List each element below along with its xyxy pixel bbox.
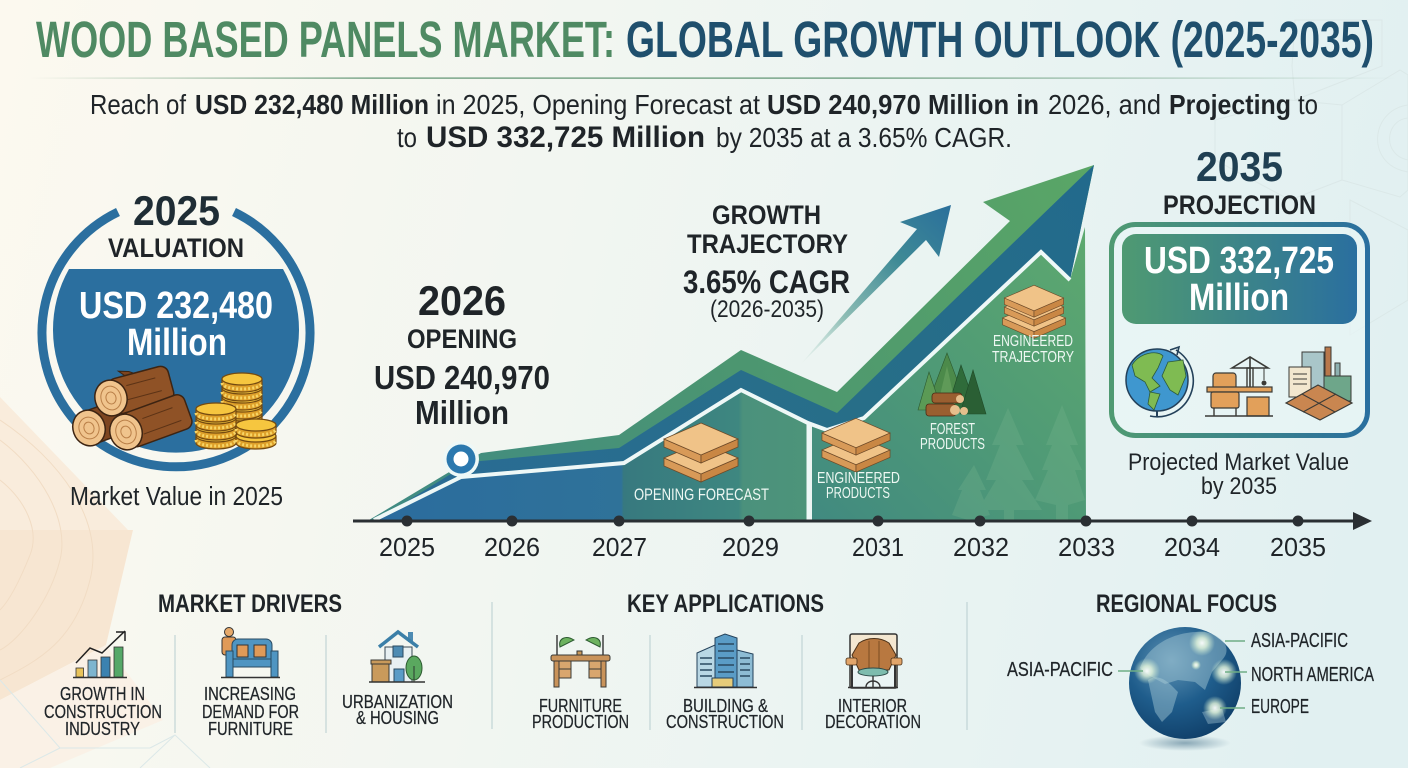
marker: 2026 point	[443, 441, 479, 477]
panel: 2025 valuation: Market Value in 2025	[70, 483, 283, 511]
arrow: secondary growth arrow	[800, 205, 951, 365]
panel: regional focus	[1007, 590, 1374, 751]
panel: 2035 projection: PROJECTION	[1163, 190, 1316, 220]
callout: 2026 opening: USD 240,970	[374, 359, 550, 396]
icon: furniture and crane	[1205, 357, 1273, 416]
label: increasing demand for furniture: FURNITURE	[208, 718, 293, 739]
callout: 2026 opening: Million	[415, 394, 509, 431]
label: urbanization and housing: & HOUSING	[356, 707, 439, 728]
area: opening forecast segment	[374, 390, 808, 521]
panel: 2035 projection: 2035	[1196, 143, 1283, 190]
subtitle: in 2025, Opening Forecast at	[436, 89, 760, 120]
icon: stacked logs	[68, 359, 194, 454]
label: Europe: EUROPE	[1251, 696, 1309, 718]
subtitle: USD 332,725 Million	[426, 121, 705, 154]
callout: growth trajectory CAGR: 3.65% CAGR	[683, 264, 850, 300]
axis year labels: 2035	[1270, 532, 1326, 562]
callout: growth trajectory CAGR: TRAJECTORY	[687, 229, 848, 259]
label: growth in construction industry: CONSTRUCTION	[44, 701, 162, 722]
label: engineered products: PRODUCTS	[826, 485, 890, 502]
label: increasing demand for furniture	[202, 683, 299, 739]
panel: key applications: KEY APPLICATIONS	[627, 590, 824, 618]
panel: market drivers: MARKET DRIVERS	[158, 590, 342, 618]
label: engineered trajectory: TRAJECTORY	[992, 349, 1074, 366]
subtitle: to	[397, 122, 417, 153]
label: engineered trajectory: ENGINEERED	[993, 333, 1073, 350]
icon: forest and logs	[918, 353, 986, 416]
label: forest products	[920, 421, 985, 453]
icon: interior chair	[846, 634, 902, 688]
label: building and construction	[666, 695, 784, 732]
subtitle: USD 240,970 Million in	[767, 89, 1039, 120]
axis year labels: 2029	[722, 532, 779, 562]
title: WOOD BASED PANELS MARKET:	[36, 11, 615, 68]
panel: 2025 valuation: 2025	[133, 187, 220, 234]
label: forest products: PRODUCTS	[920, 436, 985, 453]
panel: 2035 projection: USD 332,725	[1144, 240, 1334, 282]
label: increasing demand for furniture: DEMAND FOR	[202, 701, 299, 722]
label: engineered products: ENGINEERED	[817, 470, 900, 487]
panel: 2035 projection: Projected Market Value	[1128, 449, 1349, 476]
icon: house	[369, 632, 425, 682]
subtitle: 2026, and	[1048, 89, 1161, 120]
subtitle: USD 232,480 Million	[195, 89, 429, 120]
label: growth in construction industry	[44, 683, 162, 739]
axis year labels: 2033	[1058, 532, 1115, 562]
callout: growth trajectory CAGR: (2026-2035)	[710, 296, 824, 323]
label: growth in construction industry: GROWTH IN	[60, 683, 145, 704]
label: opening forecast: OPENING FORECAST	[634, 485, 769, 504]
label: forest products: FOREST	[930, 421, 975, 438]
callout: 2026 opening: OPENING	[407, 324, 517, 354]
icon: planks opening forecast	[664, 423, 738, 482]
icon: planks engineered products	[822, 418, 890, 472]
axis year labels: 2025	[379, 532, 435, 562]
panel: 2025 valuation	[42, 187, 310, 511]
panel: 2035 projection: Million	[1189, 277, 1289, 319]
panel: 2025 valuation: Million	[127, 322, 227, 364]
background trees	[952, 405, 1085, 520]
panel: regional focus: REGIONAL FOCUS	[1096, 590, 1277, 618]
label: building and construction: BUILDING &	[683, 695, 769, 716]
subtitle: Projecting	[1169, 89, 1291, 120]
rising band with large arrow	[369, 165, 1094, 521]
subtitle: by 2035 at a 3.65% CAGR.	[716, 122, 1012, 153]
icon: office buildings	[694, 634, 757, 688]
axis year labels: 2026	[484, 532, 540, 562]
axis year labels	[379, 532, 1326, 562]
label: growth in construction industry: INDUSTRY	[65, 718, 140, 739]
icon: world globe with markers	[1118, 627, 1247, 751]
label: furniture production: PRODUCTION	[532, 711, 629, 732]
panel: key applications	[532, 590, 921, 732]
panel: 2035 projection	[1112, 143, 1368, 500]
icon: desk with lamps	[551, 635, 610, 687]
icon: planks engineered trajectory	[1003, 285, 1065, 338]
label: Asia-Pacific left: ASIA-PACIFIC	[1007, 659, 1113, 681]
panel: 2025 valuation: USD 232,480	[79, 285, 273, 327]
icon: sofa and person	[221, 628, 280, 678]
subtitle: Reach of	[90, 89, 186, 120]
axis year labels: 2034	[1164, 532, 1220, 562]
area: forest and engineered segment	[812, 227, 1086, 521]
icon: coin stacks	[196, 373, 276, 449]
axis year labels: 2032	[953, 532, 1009, 562]
callout: growth trajectory CAGR	[683, 200, 850, 323]
label: furniture production	[532, 695, 629, 732]
label: furniture production: FURNITURE	[539, 695, 622, 716]
callout: 2026 opening: 2026	[418, 277, 506, 324]
label: Asia-Pacific right: ASIA-PACIFIC	[1251, 630, 1348, 652]
title	[36, 11, 1374, 68]
label: urbanization and housing	[342, 691, 453, 728]
callout: growth trajectory CAGR: GROWTH	[712, 200, 821, 230]
icon: growth chart	[73, 631, 127, 678]
label: interior decoration: INTERIOR	[838, 695, 907, 716]
subtitle: to	[1298, 89, 1318, 120]
label: urbanization and housing: URBANIZATION	[342, 691, 453, 712]
panel: market drivers	[44, 590, 453, 739]
label: engineered products	[817, 470, 900, 502]
label: engineered trajectory	[992, 333, 1074, 366]
axis year labels: 2027	[592, 532, 647, 562]
arrow: timeline axis	[353, 512, 1372, 530]
label: increasing demand for furniture: INCREASING	[204, 683, 296, 704]
panel: 2035 projection: by 2035	[1201, 473, 1277, 500]
subtitle	[90, 89, 1318, 154]
axis year labels: 2031	[852, 532, 904, 562]
label: building and construction: CONSTRUCTION	[666, 711, 784, 732]
icon: factory and flooring	[1286, 347, 1352, 420]
label: interior decoration: DECORATION	[825, 711, 921, 732]
label: interior decoration	[825, 695, 921, 732]
callout: 2026 opening	[374, 277, 550, 431]
chart: growth trajectory	[353, 165, 1372, 562]
icon: globe	[1126, 347, 1193, 417]
panel: 2025 valuation: VALUATION	[108, 233, 244, 263]
